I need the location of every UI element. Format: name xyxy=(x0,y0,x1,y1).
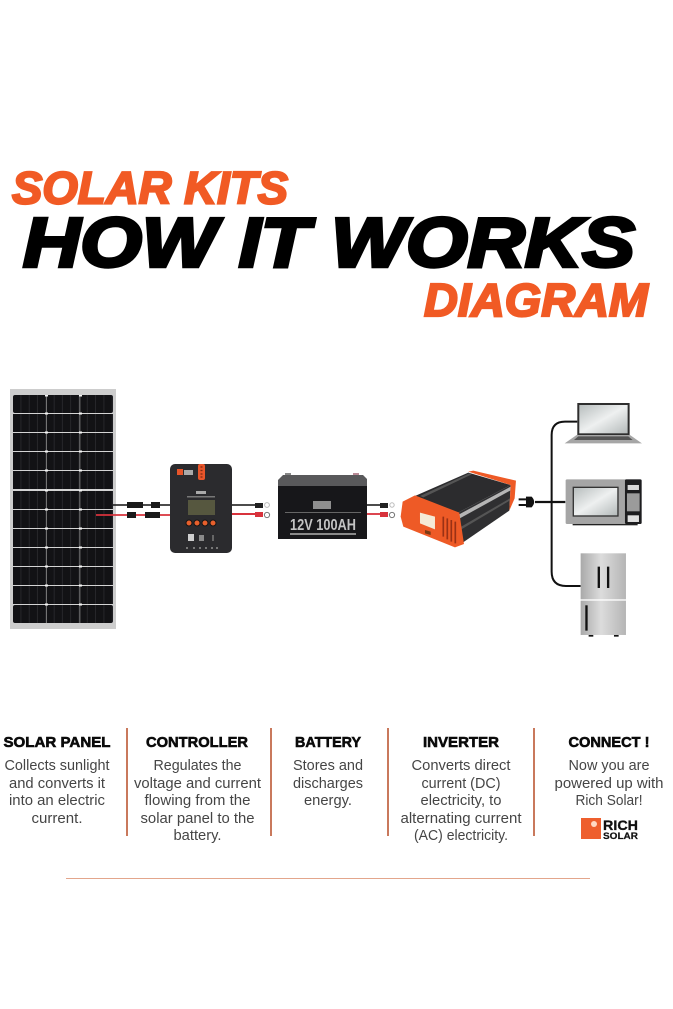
solar panel xyxy=(10,389,116,629)
refrigerator xyxy=(581,553,626,637)
column: solar panel: SOLAR PANEL xyxy=(4,734,111,751)
column: solar panel: current. xyxy=(32,810,82,827)
column: controller: solar panel to the xyxy=(140,810,254,827)
column: controller: Regulates the xyxy=(154,757,242,774)
column: battery xyxy=(293,734,363,809)
column: inverter: electricity, to xyxy=(420,792,502,809)
column: inverter xyxy=(400,734,522,844)
column: connect: Rich Solar! xyxy=(576,792,642,809)
inverter xyxy=(401,471,516,547)
logo: rich solar: SOLAR xyxy=(603,831,638,842)
laptop xyxy=(565,403,642,443)
column: controller: voltage and current xyxy=(134,775,262,792)
output cord and plug xyxy=(519,422,581,586)
wires: battery to inverter xyxy=(367,503,395,518)
charge controller xyxy=(170,464,232,553)
column: inverter: alternating current xyxy=(400,810,522,827)
column dividers xyxy=(126,728,535,836)
column: battery: Stores and xyxy=(293,757,363,774)
column: inverter: current (DC) xyxy=(422,775,500,792)
column: inverter: Converts direct xyxy=(412,757,511,774)
column: battery: BATTERY xyxy=(295,734,361,751)
column: controller: flowing from the xyxy=(144,792,250,809)
heading: solar kits: SOLAR KITS xyxy=(12,162,288,214)
column: controller xyxy=(134,734,262,844)
column: solar panel: into an electric xyxy=(9,792,105,809)
column: connect: CONNECT ! xyxy=(568,734,650,751)
battery xyxy=(278,473,367,539)
column: inverter: INVERTER xyxy=(423,734,499,751)
column: controller: battery. xyxy=(174,827,222,844)
column: battery: energy. xyxy=(304,792,352,809)
heading: how it works: HOW IT WORKS xyxy=(23,204,635,282)
title xyxy=(12,162,650,326)
column: solar panel: and converts it xyxy=(9,775,106,792)
logo: rich solar xyxy=(581,817,638,842)
column: solar panel: Collects sunlight xyxy=(4,757,110,774)
column: battery: discharges xyxy=(293,775,363,792)
column: inverter: (AC) electricity. xyxy=(414,827,508,844)
microwave xyxy=(566,479,642,525)
column: connect: Now you are xyxy=(568,757,650,774)
column: solar panel xyxy=(4,734,111,827)
column: connect xyxy=(554,734,664,809)
wires: controller to battery xyxy=(232,503,270,518)
battery label: 12V 100AH xyxy=(290,517,356,534)
column: connect: powered up with xyxy=(554,775,664,792)
column: controller: CONTROLLER xyxy=(146,734,248,751)
heading: diagram: DIAGRAM xyxy=(424,274,650,326)
bottom rule xyxy=(66,878,590,879)
logo: rich solar: RICH xyxy=(603,817,638,833)
wires: panel to controller xyxy=(96,502,170,518)
